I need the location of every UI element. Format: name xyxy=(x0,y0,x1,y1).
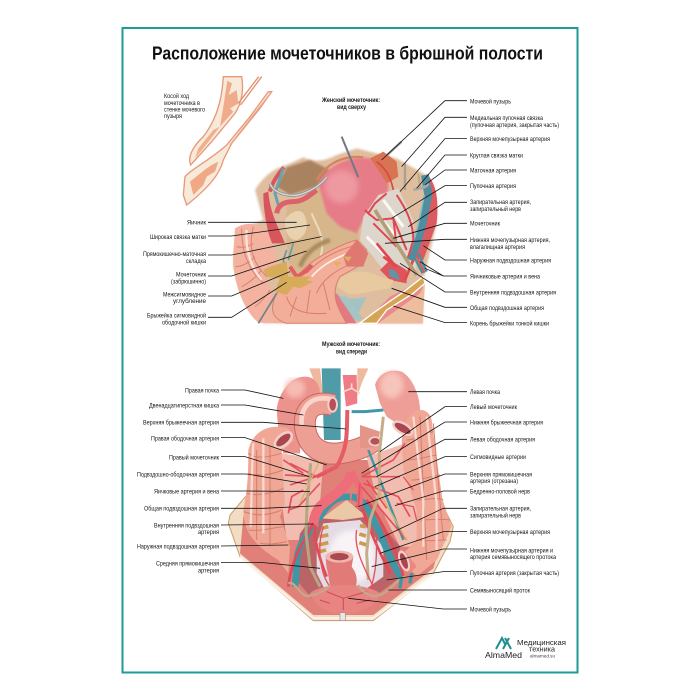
labels: female right: Мочевой пузырь xyxy=(470,97,511,105)
labels: female left xyxy=(143,219,206,326)
top muscles xyxy=(309,368,368,397)
labels: male right xyxy=(470,389,559,613)
ovary xyxy=(285,211,307,240)
labels: male left: Яичковые артерия и вена xyxy=(154,488,219,495)
labels: female right: Мочеточник xyxy=(470,220,500,228)
tan pelvis rim xyxy=(228,493,453,621)
labels: female left: Широкая связка матки xyxy=(150,234,206,241)
mesentery left xyxy=(282,453,323,540)
bladder xyxy=(310,585,380,615)
colon lower band xyxy=(272,240,367,323)
labels: female left: ободочной кишки xyxy=(162,318,206,326)
inset: oblique ureter course xyxy=(183,77,272,205)
labels: male right: Мочевой пузырь xyxy=(470,605,511,613)
ureter retroperitoneal xyxy=(283,243,293,277)
tan backdrop xyxy=(233,148,437,323)
lower branches xyxy=(320,527,377,590)
icon: logo mark xyxy=(496,638,511,649)
labels: male left: артерия xyxy=(198,529,219,536)
mesentery yellow xyxy=(263,262,313,295)
bottom pink xyxy=(323,280,423,323)
labels: male left: артерия xyxy=(198,567,219,574)
colon left of image xyxy=(243,427,294,573)
labels: male right: Левая почка xyxy=(470,389,500,396)
illustration: female pelvis from above xyxy=(233,137,437,323)
left renal vein xyxy=(352,410,383,412)
leader lines: female right xyxy=(382,101,467,323)
labels: male right: артерия (отрезана) xyxy=(470,478,518,485)
heading: male ureter: Мужской мочеточник: xyxy=(322,340,380,348)
branching arteries left xyxy=(283,460,327,513)
labels: female right xyxy=(470,97,559,328)
labels: male left: Верхняя брыжеечная артерия xyxy=(143,418,219,426)
labels: male right: Запирательная артерия, xyxy=(470,506,531,513)
title: Расположение мочеточников в брюшной полости xyxy=(152,44,543,64)
broad ligament tan xyxy=(287,187,360,277)
labels: female right: Нижняя мочепузырная артерия, xyxy=(470,237,550,244)
right outer wall red xyxy=(413,173,437,260)
inset caption: пузыря xyxy=(164,113,182,120)
labels: male right: Верхняя мочепузырная артерия xyxy=(470,529,550,536)
labels: female right: Наружная подвздошная артерия xyxy=(470,258,551,264)
inset caption: мочеточника в xyxy=(164,100,200,107)
duodenum xyxy=(305,404,375,454)
labels: female left: (забрюшинно) xyxy=(171,277,206,285)
labels: female right: (пупочная артерия, закрытая часть) xyxy=(470,122,559,129)
labels: male left: Внутренняя подвздошная xyxy=(154,523,219,530)
heading: male ureter xyxy=(322,340,380,356)
labels: male right: Семявыносящий проток xyxy=(470,586,530,594)
uterus and peritoneum dome xyxy=(318,158,388,233)
inner pelvic wall xyxy=(240,460,443,615)
labels: male right: Нижняя брыжеечная артерия xyxy=(470,418,543,426)
labels: female right: влагалищная артерия xyxy=(470,244,525,251)
labels: female right: Яичниковые артерия и вена xyxy=(470,274,540,280)
labels: female left: Яичник xyxy=(187,219,206,226)
labels: male right: Бедренно-половой нерв xyxy=(470,487,530,495)
heading: female ureter xyxy=(321,96,380,111)
branching arteries right xyxy=(358,443,410,540)
labels: female left: складка xyxy=(186,258,206,265)
labels: female left: Прямокишечно-маточная xyxy=(143,251,206,258)
leader lines: male right xyxy=(348,392,467,609)
kidney right of image xyxy=(375,371,420,423)
probes xyxy=(342,137,358,177)
labels: male left: Двенадцатиперстная кишка xyxy=(149,402,219,409)
labels: male right: Пупочная артерия (закрытая часть) xyxy=(470,570,559,577)
bottom midline tab xyxy=(340,613,345,621)
labels: male left: Наружная подвздошная артерия xyxy=(137,543,219,550)
labels: female right: Круглая связка матки xyxy=(470,153,523,160)
vas deferens xyxy=(288,577,405,596)
labels: female right: Медиальная пупочная связка xyxy=(470,115,543,122)
colon cut end lower right xyxy=(398,552,417,573)
labels: female right: Верхняя мочепузырная артерия xyxy=(470,136,550,143)
inset caption: Косой ход xyxy=(164,92,189,100)
labels: male right: Левый мочеточник xyxy=(470,403,517,411)
labels: female right: Внутренняя подвздошная артерия xyxy=(470,290,556,296)
labels: female right: Пупочная артерия xyxy=(470,183,516,190)
labels: male right: Нижняя мочепузырная артерия и xyxy=(470,547,553,554)
labels: male left xyxy=(137,387,219,574)
vena cava xyxy=(322,368,341,440)
labels: male left: Подвздошно-ободочная артерия xyxy=(137,470,219,478)
labels: male left: Правая почка xyxy=(185,387,219,394)
dark back wall xyxy=(277,160,330,195)
sacral nerves yellow xyxy=(319,526,367,552)
heading: female ureter: Женский мочеточник: xyxy=(321,96,380,104)
logo: AlmaMed: almamed.su xyxy=(530,654,556,658)
skin / tan bottom right xyxy=(360,277,425,323)
page frame xyxy=(122,28,578,672)
sacrum xyxy=(322,500,367,520)
central basin xyxy=(293,503,400,600)
heading: male ureter: вид спереди xyxy=(336,348,367,356)
leader lines: male left xyxy=(221,390,346,568)
ovarian vessels xyxy=(414,253,427,273)
labels: male right: артерия семявыносящего протока xyxy=(470,554,556,561)
grey fan right xyxy=(360,188,417,270)
labels: female left: Межсигмовидное xyxy=(163,291,206,298)
colon right of image xyxy=(400,410,452,577)
colon left loop xyxy=(233,224,287,323)
mesentery right xyxy=(367,443,420,547)
labels: male right: Сигмовидные артерии xyxy=(470,454,526,461)
bottom tan peritoneum xyxy=(333,272,393,294)
labels: male right: Верхняя прямокишечная xyxy=(470,471,532,478)
inset caption xyxy=(164,92,205,120)
labels: female right: Корень брыжейки тонкой кишки xyxy=(470,320,549,328)
labels: female right: Маточная артерия xyxy=(470,167,516,174)
superior mesenteric artery xyxy=(317,410,347,477)
cut blue stubs xyxy=(400,573,412,588)
blue iliac veins xyxy=(295,497,350,587)
red arteries xyxy=(365,193,413,257)
aorta xyxy=(343,375,357,407)
bladder opening xyxy=(370,152,398,183)
logo: AlmaMed xyxy=(485,638,566,660)
labels: female left: Мочеточник xyxy=(176,272,206,279)
labels: male left: Общая подвздошная артерия xyxy=(144,504,219,512)
probe at bottom xyxy=(258,293,277,323)
labels: female right: Запирательная артерия, xyxy=(470,199,531,206)
left vessels xyxy=(263,192,285,243)
heading: female ureter: вид сверху xyxy=(337,104,366,111)
labels: male right: запирательный нерв xyxy=(470,511,521,519)
ureters and gonadal xyxy=(306,463,320,587)
iliac arteries xyxy=(313,473,352,527)
big vein xyxy=(410,175,428,260)
kidney left of image xyxy=(277,377,320,453)
inset caption: стенке мочевого xyxy=(164,106,205,114)
labels: female right: запирательный нерв xyxy=(470,205,521,213)
rectum xyxy=(326,552,357,590)
ureter xyxy=(375,210,417,275)
labels: male left: Правая ободочная артерия xyxy=(151,434,219,442)
labels: male right: Левая ободочная артерия xyxy=(470,435,535,443)
leader lines: female left xyxy=(208,222,322,317)
labels: female left: Брыжейка сигмовидной xyxy=(147,311,206,319)
labels: female right: Общая подвздошная артерия xyxy=(470,304,544,312)
illustration: male abdomen from front xyxy=(228,368,453,621)
labels: female left: углубление xyxy=(173,297,206,305)
logo: AlmaMed: Медицинская xyxy=(517,640,566,647)
logo: AlmaMed: AlmaMed xyxy=(485,650,522,660)
labels: male left: Средняя прямокишечная xyxy=(156,561,219,568)
labels: male left: Правый мочеточник xyxy=(169,453,219,461)
logo: AlmaMed: техника xyxy=(529,646,555,654)
retractor xyxy=(270,177,327,195)
